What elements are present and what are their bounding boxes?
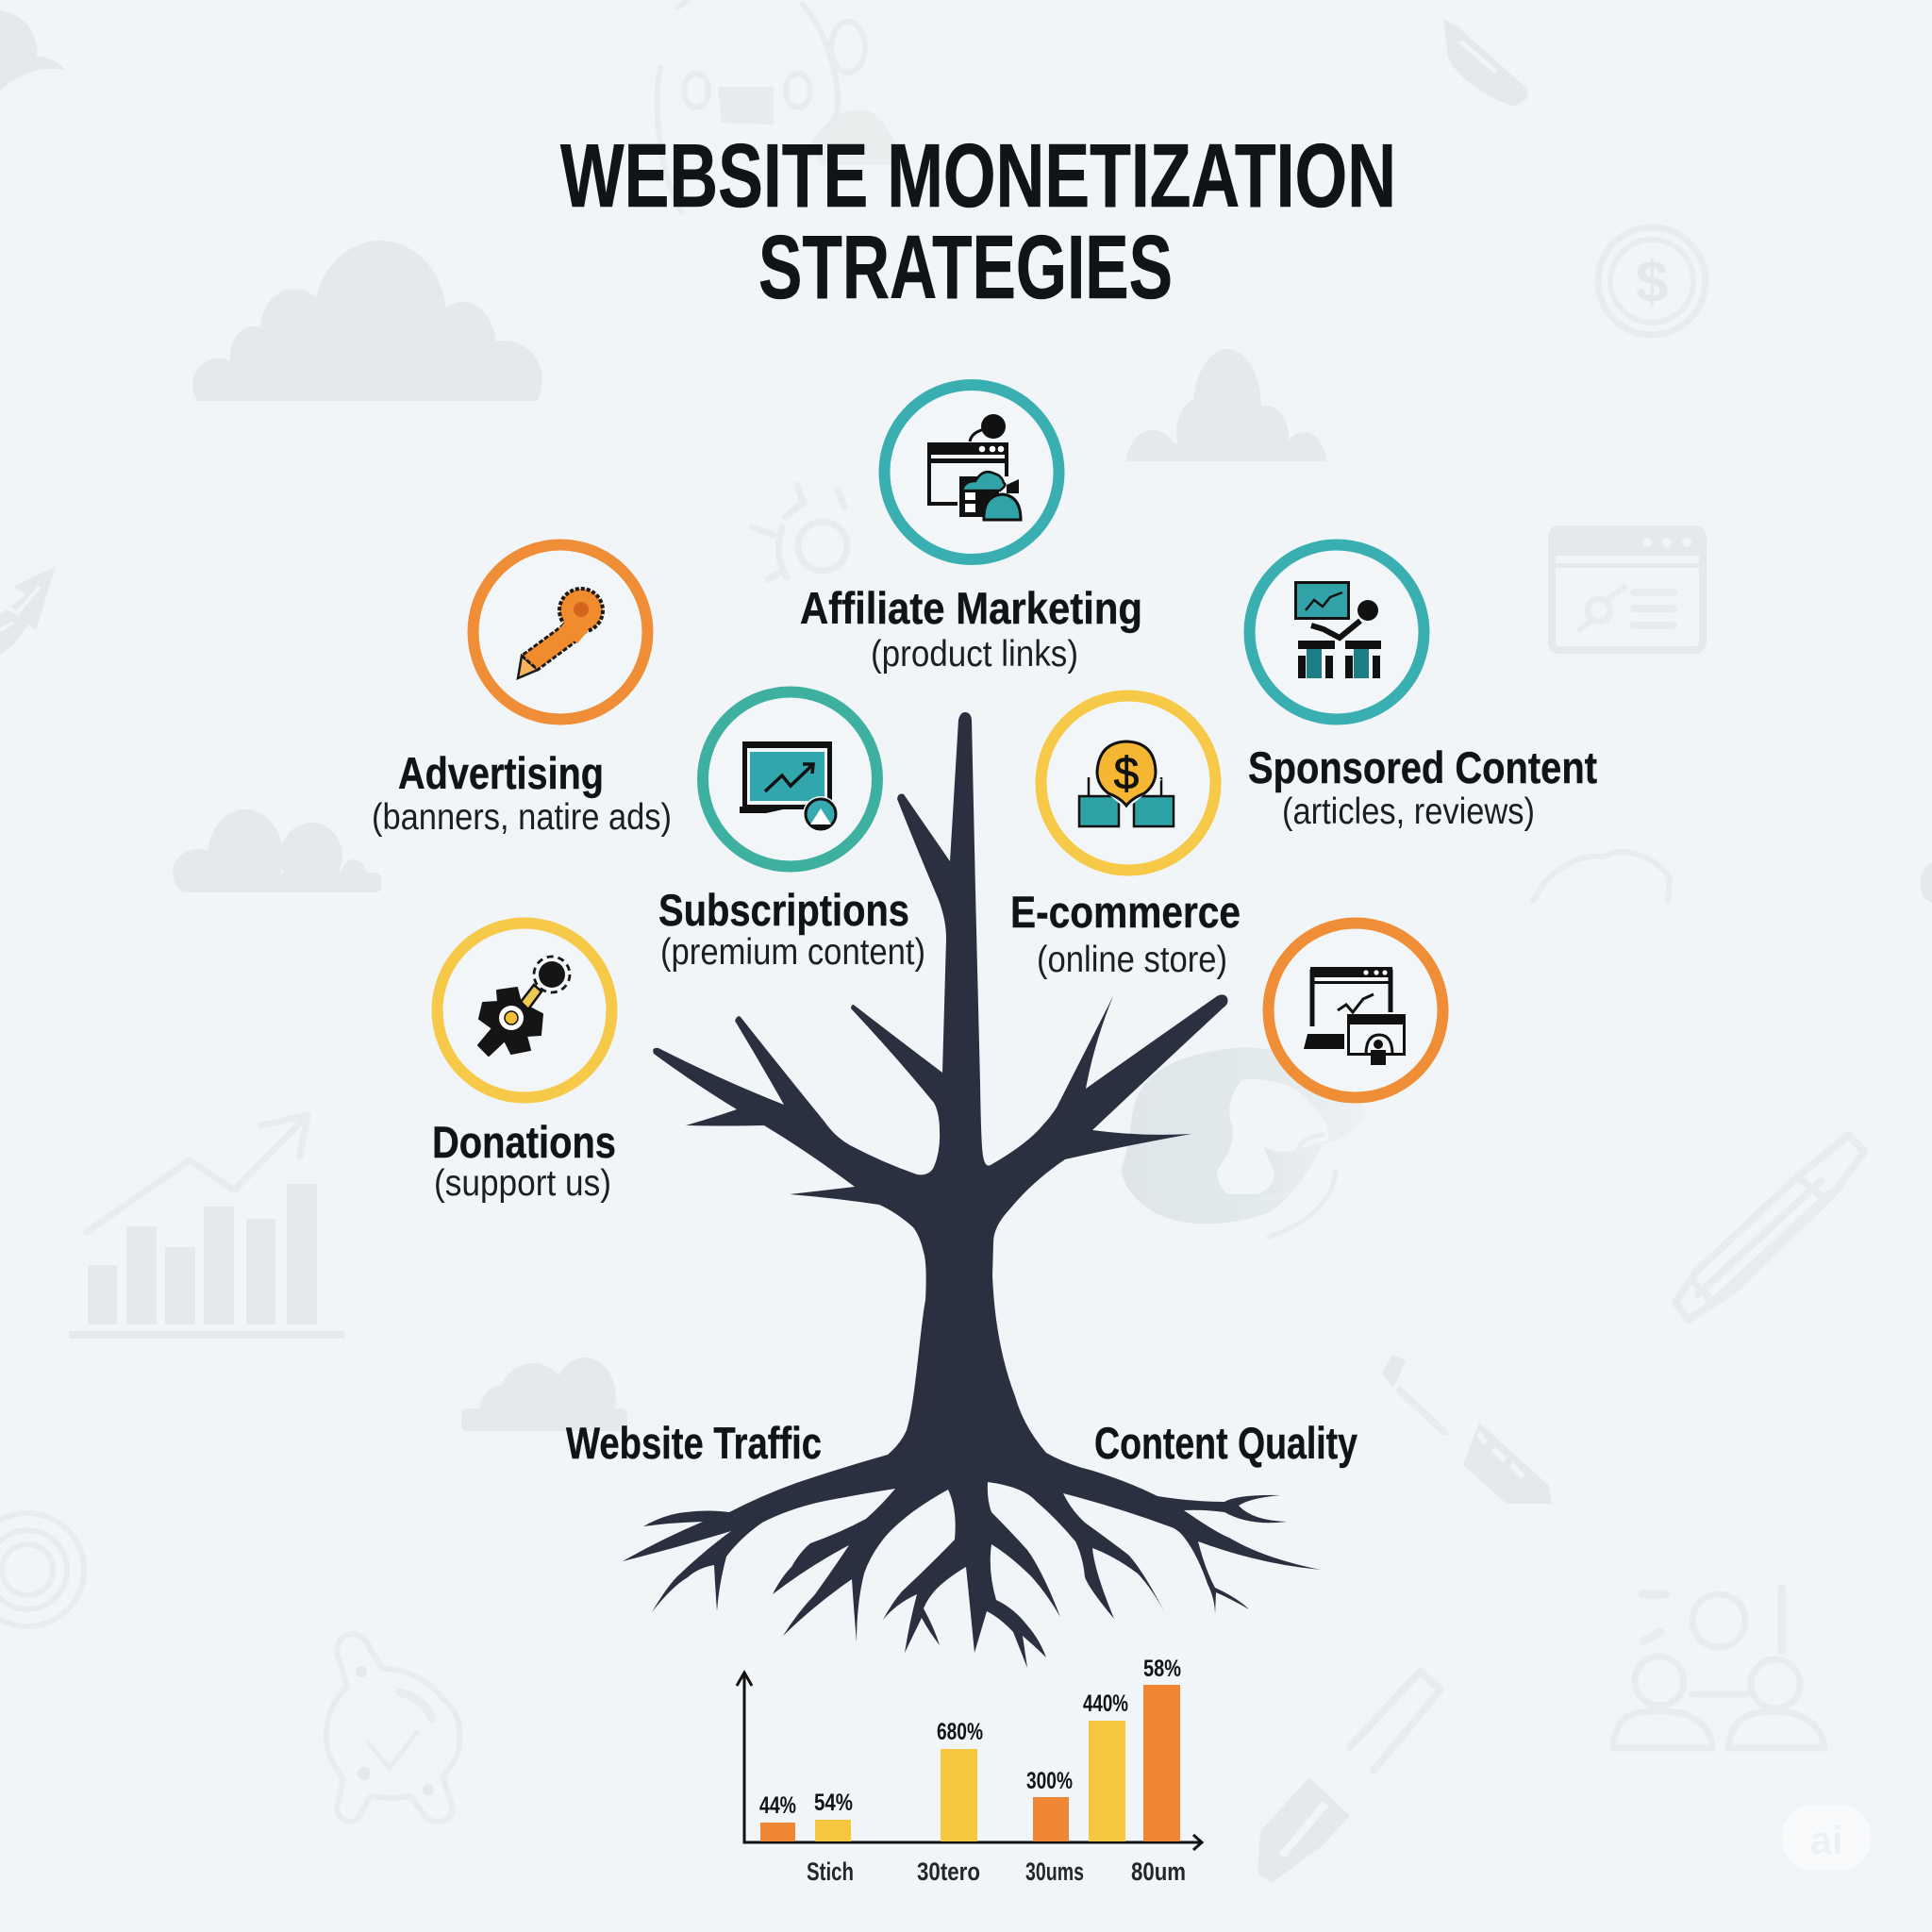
background: bar chart with arrow <box>69 1115 344 1339</box>
icon: gear and lever <box>478 957 570 1056</box>
value labels: 58% <box>1143 1656 1181 1682</box>
label: e-commerce <box>1010 887 1241 980</box>
label: sponsored content: (articles, reviews) <box>1282 791 1535 832</box>
label: e-commerce: E-commerce <box>1010 887 1241 937</box>
background: pencil icon <box>1257 1672 1441 1883</box>
background: cloud top left <box>192 241 542 401</box>
background: dollar coin <box>1598 227 1706 335</box>
category labels: Stich <box>807 1857 854 1886</box>
ring: sponsored content <box>1249 545 1424 719</box>
category labels: 30tero <box>917 1857 980 1886</box>
value labels: 680% <box>937 1719 983 1745</box>
label: affiliate marketing: (product links) <box>871 634 1078 675</box>
background: cloud near website traffic <box>461 1357 627 1439</box>
icon: presenter at desks <box>1296 583 1381 678</box>
background: corner blob <box>0 10 65 91</box>
background: rocket arrow <box>0 566 56 655</box>
label: advertising: (banners, natire ads) <box>372 797 672 838</box>
background: gear sun icon <box>753 485 847 579</box>
ring: affiliate <box>885 385 1058 559</box>
background: knife icon <box>1443 19 1528 107</box>
icon: monitor with growth line <box>740 741 839 832</box>
value labels <box>759 1656 1181 1819</box>
label: donations: Donations <box>432 1117 616 1167</box>
background: browser window <box>1552 529 1703 650</box>
label: subscriptions: (premium content) <box>660 932 925 973</box>
tree silhouette with branches and roots <box>623 712 1321 1668</box>
background: outline mascot icon <box>658 0 896 212</box>
bar chart <box>737 1656 1202 1886</box>
root label: website traffic: Website Traffic <box>566 1418 822 1468</box>
strategy: affiliate marketing <box>800 385 1142 675</box>
title <box>560 125 1396 318</box>
strategy: advertising <box>372 545 672 838</box>
category labels: 80um <box>1131 1857 1186 1886</box>
background: ai badge <box>1782 1806 1871 1870</box>
label: affiliate marketing: Affiliate Marketing <box>800 583 1142 633</box>
label: donations <box>432 1117 616 1204</box>
value labels: 440% <box>1083 1690 1128 1717</box>
value labels: 54% <box>814 1790 853 1816</box>
icon: dollar pin and boxes: $ <box>1114 749 1139 799</box>
ring: orange <box>1268 923 1443 1098</box>
title: WEBSITE MONETIZATION <box>560 125 1396 226</box>
ring: e-commerce <box>1041 696 1215 870</box>
label: affiliate marketing <box>800 583 1142 675</box>
background: concentric circles <box>0 1513 84 1626</box>
ring: donations <box>438 923 611 1098</box>
chart axes <box>737 1673 1202 1850</box>
icon: orange key <box>518 589 603 678</box>
strategy: subscriptions <box>658 692 925 973</box>
value labels: 44% <box>759 1792 796 1819</box>
background: cloud upper right <box>1126 349 1326 461</box>
strategy: unnamed orange window circle <box>1268 923 1443 1098</box>
label: donations: (support us) <box>434 1163 611 1204</box>
strategy: e-commerce <box>1010 696 1241 980</box>
background: ai badge: ai <box>1809 1818 1843 1862</box>
icon: browser with cloud and person <box>927 414 1021 520</box>
value labels: 300% <box>1026 1768 1073 1794</box>
strategy: donations <box>432 923 616 1204</box>
label: subscriptions <box>658 885 925 973</box>
background: outline cloud right <box>1533 852 1932 903</box>
label: advertising: Advertising <box>398 748 604 798</box>
label: sponsored content: Sponsored Content <box>1248 742 1597 792</box>
background: globe blob <box>1122 1047 1366 1237</box>
background: people icon <box>1613 1589 1824 1748</box>
strategy: sponsored content <box>1248 545 1597 832</box>
bars <box>760 1685 1180 1841</box>
background: dollar coin: $ <box>1636 250 1668 315</box>
background: alarm clock <box>326 1634 459 1822</box>
icon: browser windows with trend <box>1304 967 1406 1065</box>
background: cloud mid left <box>173 809 381 892</box>
root label: content quality: Content Quality <box>1094 1418 1357 1468</box>
label: sponsored content <box>1248 742 1597 832</box>
ring: advertising <box>474 545 647 719</box>
category labels: 30ums <box>1025 1857 1084 1886</box>
background: pen icon <box>1675 1135 1864 1320</box>
background: brush icon <box>1382 1355 1552 1504</box>
title: STRATEGIES <box>758 217 1173 318</box>
ring: subscriptions <box>703 692 877 866</box>
icon: dollar pin and boxes <box>1079 741 1174 826</box>
label: e-commerce: (online store) <box>1037 940 1227 980</box>
category labels <box>807 1857 1186 1886</box>
label: advertising <box>372 748 672 838</box>
label: subscriptions: Subscriptions <box>658 885 909 935</box>
